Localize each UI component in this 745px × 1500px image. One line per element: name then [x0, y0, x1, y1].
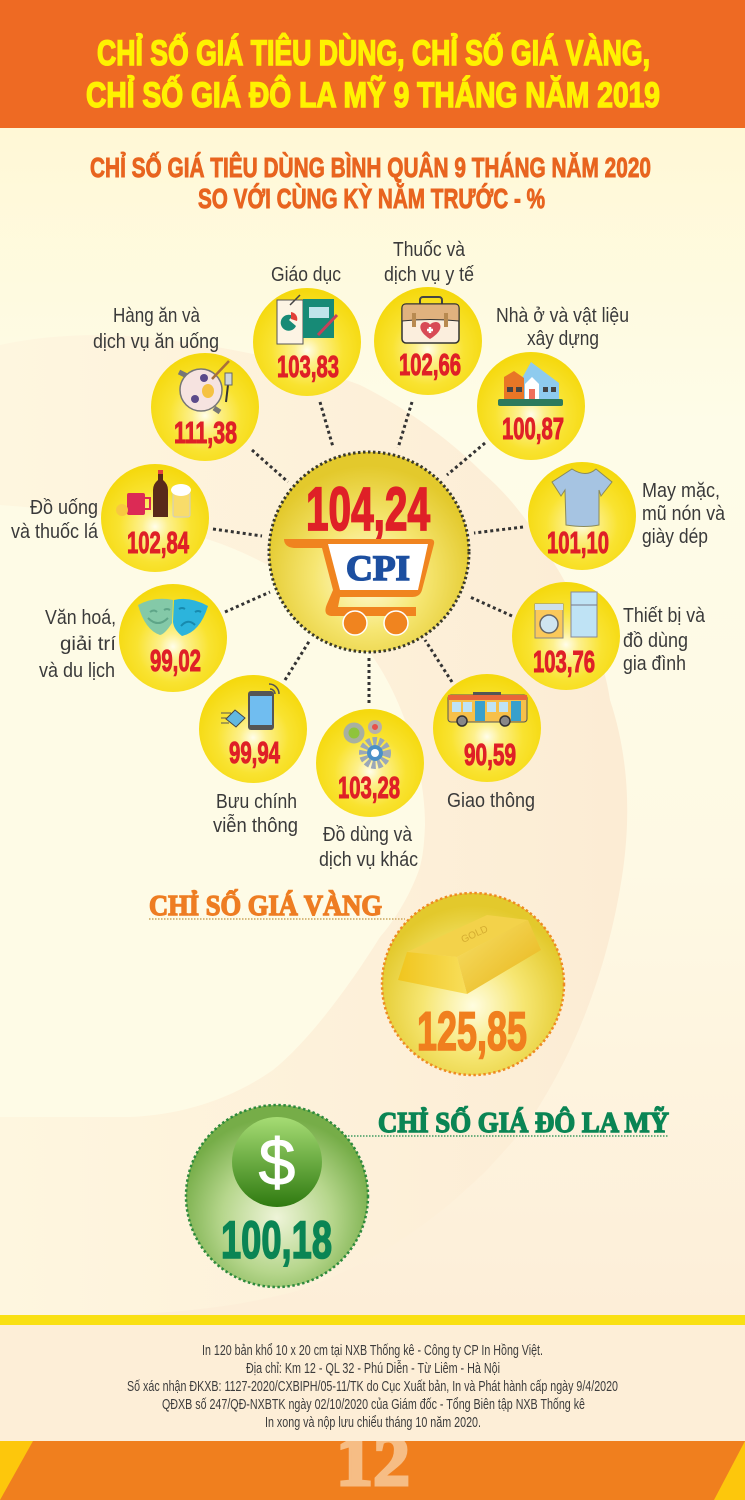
label: appliances [623, 605, 706, 675]
label: medicine: Thuốc và [393, 239, 466, 261]
heading: gold index: CHỈ SỐ GIÁ VÀNG [149, 888, 382, 922]
item: housing [477, 352, 585, 460]
subtitle [90, 151, 651, 214]
imprint text [127, 1342, 618, 1431]
label: food [93, 305, 219, 353]
item: food [151, 353, 259, 461]
label: housing [496, 305, 629, 350]
bottom band [0, 1441, 745, 1500]
label: culture: và du lịch [39, 660, 115, 682]
label: other goods [319, 824, 418, 871]
item: clothing [528, 462, 636, 570]
US dollar index circle: 100,18 [221, 1211, 332, 1270]
label: culture: giải trí [60, 634, 117, 655]
icon: gold bar: GOLD [460, 924, 490, 946]
footer yellow band [0, 1315, 745, 1325]
icon: phone [221, 684, 279, 730]
imprint text: In xong và nộp lưu chiểu tháng 10 năm 2020. [265, 1414, 481, 1431]
title [86, 33, 660, 115]
icon: houses [498, 362, 563, 406]
icon: books [277, 295, 337, 344]
item: food: 111,38 [174, 415, 237, 450]
label: appliances: gia đình [623, 653, 686, 675]
item: transport: 90,59 [464, 737, 516, 772]
item: beverages [101, 464, 209, 572]
icon: shopping cart [284, 539, 434, 635]
gold index circle [382, 893, 564, 1075]
imprint text: In 120 bản khổ 10 x 20 cm tại NXB Thống kê - Công ty CP In Hồng Việt. [202, 1342, 543, 1359]
item: other goods: 103,28 [338, 770, 400, 805]
US dollar index circle [186, 1105, 368, 1287]
item: other goods [316, 709, 424, 817]
item: housing: 100,87 [502, 411, 564, 446]
label: clothing: May mặc, [642, 480, 720, 502]
label: housing: xây dựng [527, 328, 599, 350]
icon: t-shirt [552, 469, 612, 526]
label: beverages: và thuốc lá [11, 521, 99, 543]
item: telecom: 99,94 [229, 735, 280, 770]
icon: shopping cart: CPI [346, 548, 410, 588]
item: clothing: 101,10 [547, 525, 609, 560]
item: transport [433, 674, 541, 782]
item: medicine: 102,66 [399, 347, 461, 382]
central CPI circle [269, 452, 469, 652]
label: culture: Văn hoá, [45, 607, 116, 629]
heading: US dollar index: CHỈ SỐ GIÁ ĐÔ LA MỸ [378, 1105, 669, 1139]
background [0, 128, 745, 1318]
label: clothing [642, 480, 726, 548]
item: education: 103,83 [277, 349, 339, 384]
item: culture [119, 584, 227, 692]
item: education [253, 288, 361, 396]
item: beverages: 102,84 [127, 525, 189, 560]
subtitle: SO VỚI CÙNG KỲ NĂM TRƯỚC - % [198, 183, 545, 214]
label: transport: Giao thông [447, 790, 535, 812]
item: culture: 99,02 [150, 643, 201, 678]
imprint text: QĐXB số 247/QĐ-NXBTK ngày 02/10/2020 của Giám đốc - Tổng Biên tập NXB Thống kê [162, 1396, 585, 1413]
label: culture [39, 607, 117, 682]
label: telecom: viễn thông [213, 814, 298, 837]
icon: drinks [116, 470, 191, 517]
page number: 12 [336, 1421, 410, 1500]
label: housing: Nhà ở và vật liệu [496, 305, 629, 327]
icon: dollar coin [232, 1117, 322, 1207]
item: appliances: 103,76 [533, 644, 595, 679]
imprint text: Địa chỉ: Km 12 - QL 32 - Phú Diễn - Từ Liêm - Hà Nội [246, 1360, 500, 1377]
item: telecom [199, 675, 307, 783]
label: clothing: giày dép [642, 526, 708, 548]
label: beverages [11, 497, 99, 543]
icon: medical bag [402, 297, 459, 343]
label: clothing: mũ nón và [642, 503, 726, 525]
icon: pot [179, 361, 232, 412]
icon: masks [138, 599, 208, 636]
item: appliances [512, 582, 620, 690]
gold index circle: 125,85 [417, 1000, 527, 1062]
label: beverages: Đồ uống [30, 497, 98, 519]
central value: 104,24 [306, 475, 430, 543]
label: telecom: Bưu chính [216, 791, 297, 813]
label: medicine [384, 239, 474, 286]
label: food: dịch vụ ăn uống [93, 331, 219, 353]
header band [0, 0, 745, 128]
label: medicine: dịch vụ y tế [384, 264, 474, 286]
icon: washer and fridge [535, 592, 597, 638]
label: food: Hàng ăn và [113, 305, 201, 327]
label: appliances: Thiết bị và [623, 605, 706, 627]
label: appliances: đồ dùng [623, 630, 688, 652]
icon: gold bar [398, 915, 541, 994]
label: other goods: dịch vụ khác [319, 849, 418, 871]
connector lines [213, 402, 523, 703]
icon: gears [346, 722, 387, 765]
label: education: Giáo dục [271, 264, 341, 286]
item: medicine [374, 287, 482, 395]
label: other goods: Đồ dùng và [323, 824, 413, 846]
icon: dollar coin: $ [259, 1125, 295, 1199]
label: telecom [213, 791, 298, 837]
footer panel [0, 1325, 745, 1441]
icon: bus [448, 692, 527, 726]
